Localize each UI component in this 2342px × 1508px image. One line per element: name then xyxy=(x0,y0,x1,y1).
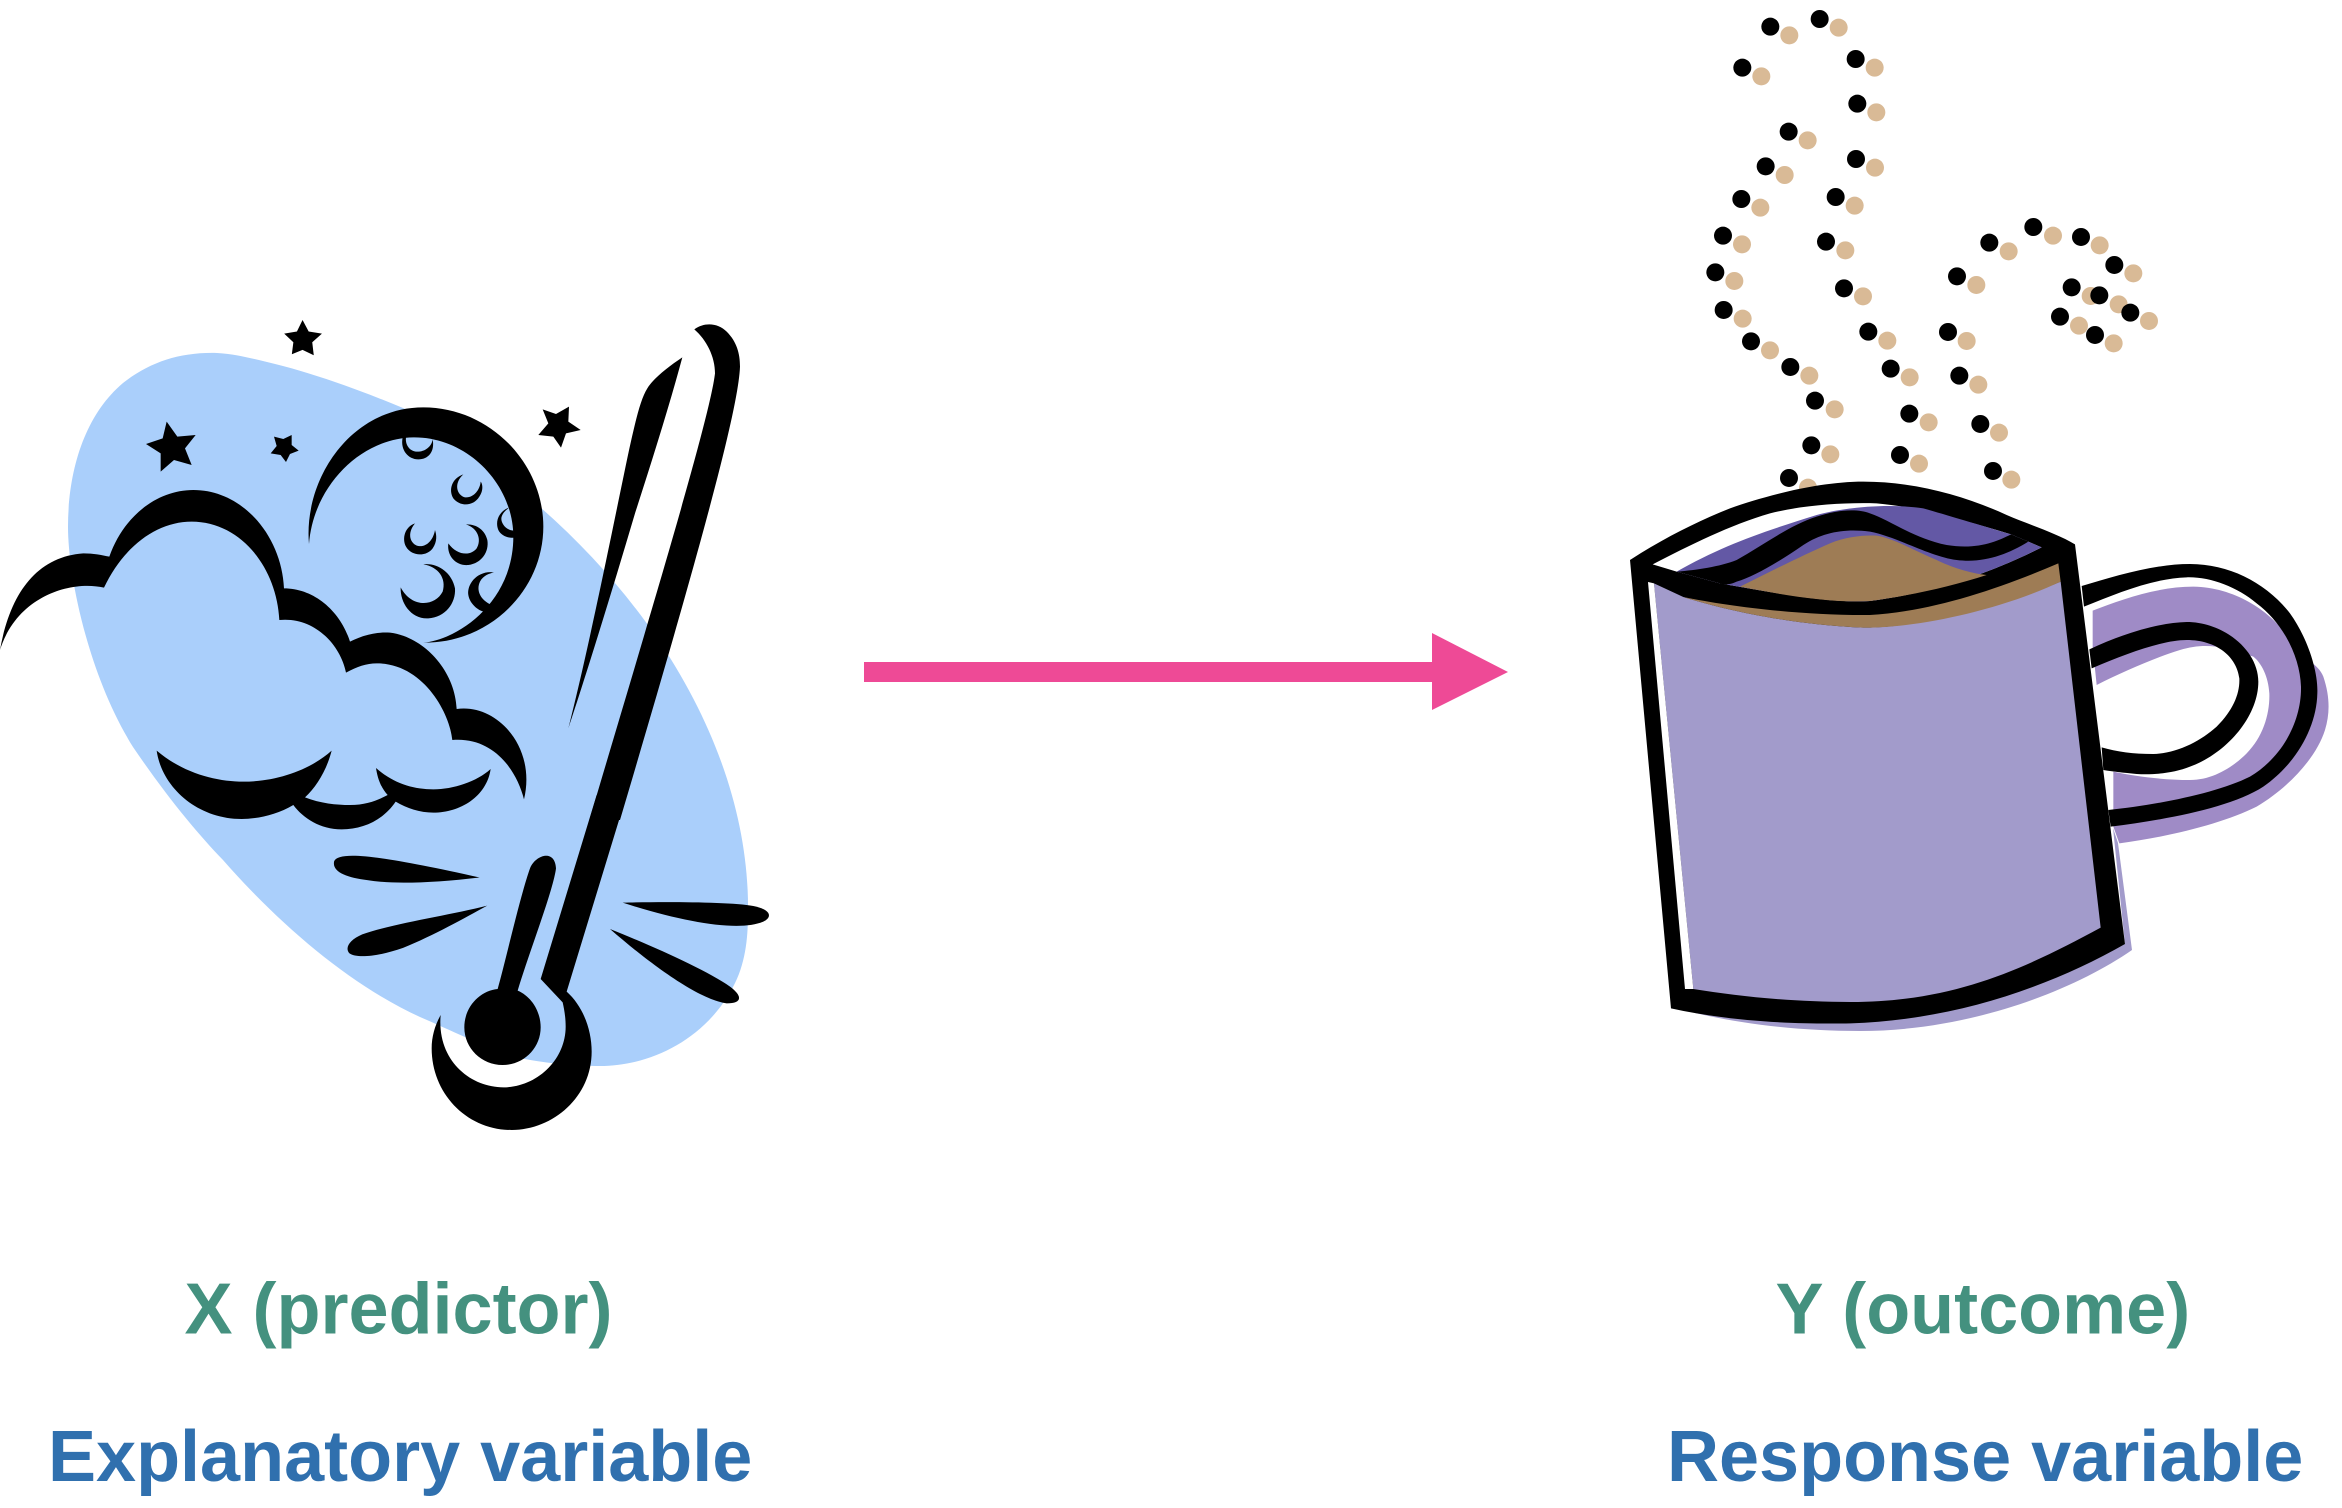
icon: coffee mug xyxy=(1630,482,2329,1031)
moon crescent xyxy=(309,407,543,643)
mug handle shadow xyxy=(2093,587,2329,843)
thermometer bulb, mercury and right wind strokes xyxy=(432,795,769,1130)
mug body and rim xyxy=(1630,482,2132,1031)
mug body shadow xyxy=(1695,828,2132,1031)
coffee surface xyxy=(1740,536,1987,601)
coffee rim band xyxy=(1683,563,2061,628)
left stars xyxy=(146,422,299,472)
coffee wave line xyxy=(1677,510,2028,584)
label: Y (outcome): Y (outcome) xyxy=(1776,1270,2190,1350)
icon: thermometer with cloud, moon and stars xyxy=(0,320,769,1130)
icon: steam dots xyxy=(1706,10,2158,497)
thermometer tube, inner stroke and right star xyxy=(538,324,740,820)
mug left highlight xyxy=(1648,582,1693,989)
top star and left wind strokes xyxy=(284,320,487,956)
blue background blob xyxy=(68,353,748,1066)
mug handle lines xyxy=(2082,564,2317,827)
mug inner wall xyxy=(1677,506,2042,601)
label: Response variable: Response variable xyxy=(1667,1417,2303,1497)
mug opening xyxy=(1653,503,2042,601)
cloud top outline xyxy=(0,490,526,799)
mug outline xyxy=(1630,482,2125,1024)
mug front face xyxy=(1654,582,2101,1002)
moon craters xyxy=(401,437,514,618)
cloud bottom outline xyxy=(157,751,491,829)
cloud and moon xyxy=(0,407,543,829)
arrow from X to Y xyxy=(864,633,1508,710)
label: X (predictor): X (predictor) xyxy=(184,1270,613,1350)
label: Explanatory variable: Explanatory variable xyxy=(48,1417,752,1497)
